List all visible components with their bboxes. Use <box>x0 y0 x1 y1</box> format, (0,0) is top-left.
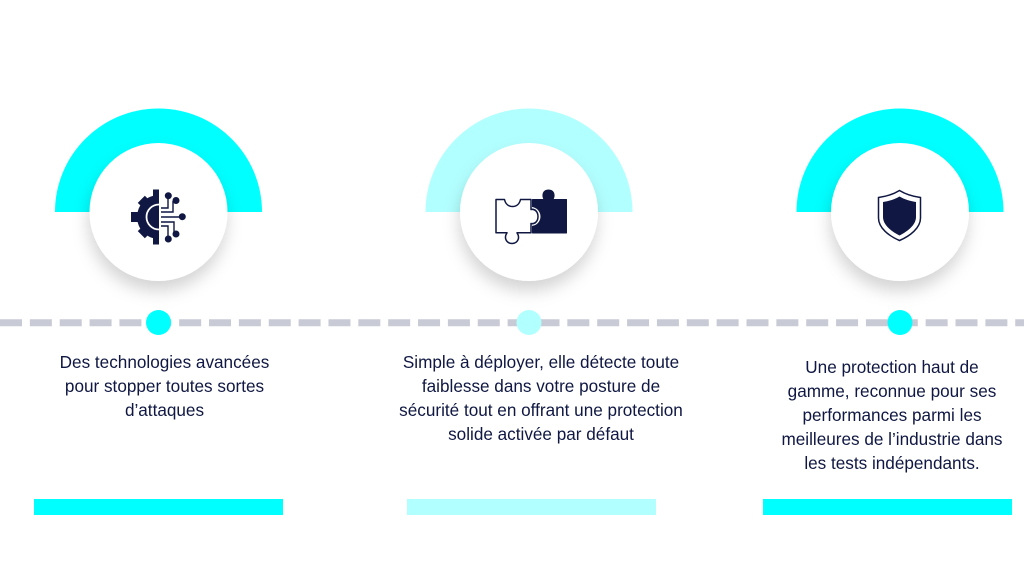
timeline dashed line <box>0 319 1024 326</box>
text: protection <box>781 357 1003 473</box>
text: deployment: faiblesse dans votre posture de <box>422 376 660 396</box>
text: technology: d’attaques <box>125 400 204 420</box>
text: deployment: sécurité tout en offrant une protection <box>399 400 683 420</box>
circle: technology <box>90 143 228 281</box>
text: deployment: solide activée par défaut <box>448 424 634 444</box>
circle: deployment <box>460 143 598 281</box>
bar: technology <box>34 499 283 515</box>
timeline dot 1 <box>146 310 171 335</box>
timeline dot 2 <box>516 310 542 335</box>
text: protection: gamme, reconnue pour ses <box>788 381 996 401</box>
text: technology: pour stopper toutes sortes <box>65 376 264 396</box>
icon: shield <box>878 190 920 240</box>
arc: technology <box>55 108 262 212</box>
timeline dot 3 <box>888 310 912 335</box>
arc: protection <box>796 108 1004 212</box>
bar: protection <box>763 499 1012 515</box>
text: protection: performances parmi les <box>802 405 982 425</box>
text: protection: Une protection haut de <box>805 357 979 377</box>
text: technology <box>60 352 269 420</box>
arc: deployment <box>426 108 632 212</box>
circle: protection <box>831 143 969 281</box>
bar: deployment <box>407 499 656 515</box>
text: protection: meilleures de l’industrie dans <box>781 429 1003 449</box>
icon: puzzle pieces <box>496 190 566 244</box>
text: deployment <box>399 352 683 444</box>
text: deployment: Simple à déployer, elle détecte toute <box>403 352 679 372</box>
text: technology: Des technologies avancées <box>60 352 269 372</box>
icon: gear with circuits <box>131 190 186 244</box>
text: protection: les tests indépendants. <box>804 453 980 473</box>
